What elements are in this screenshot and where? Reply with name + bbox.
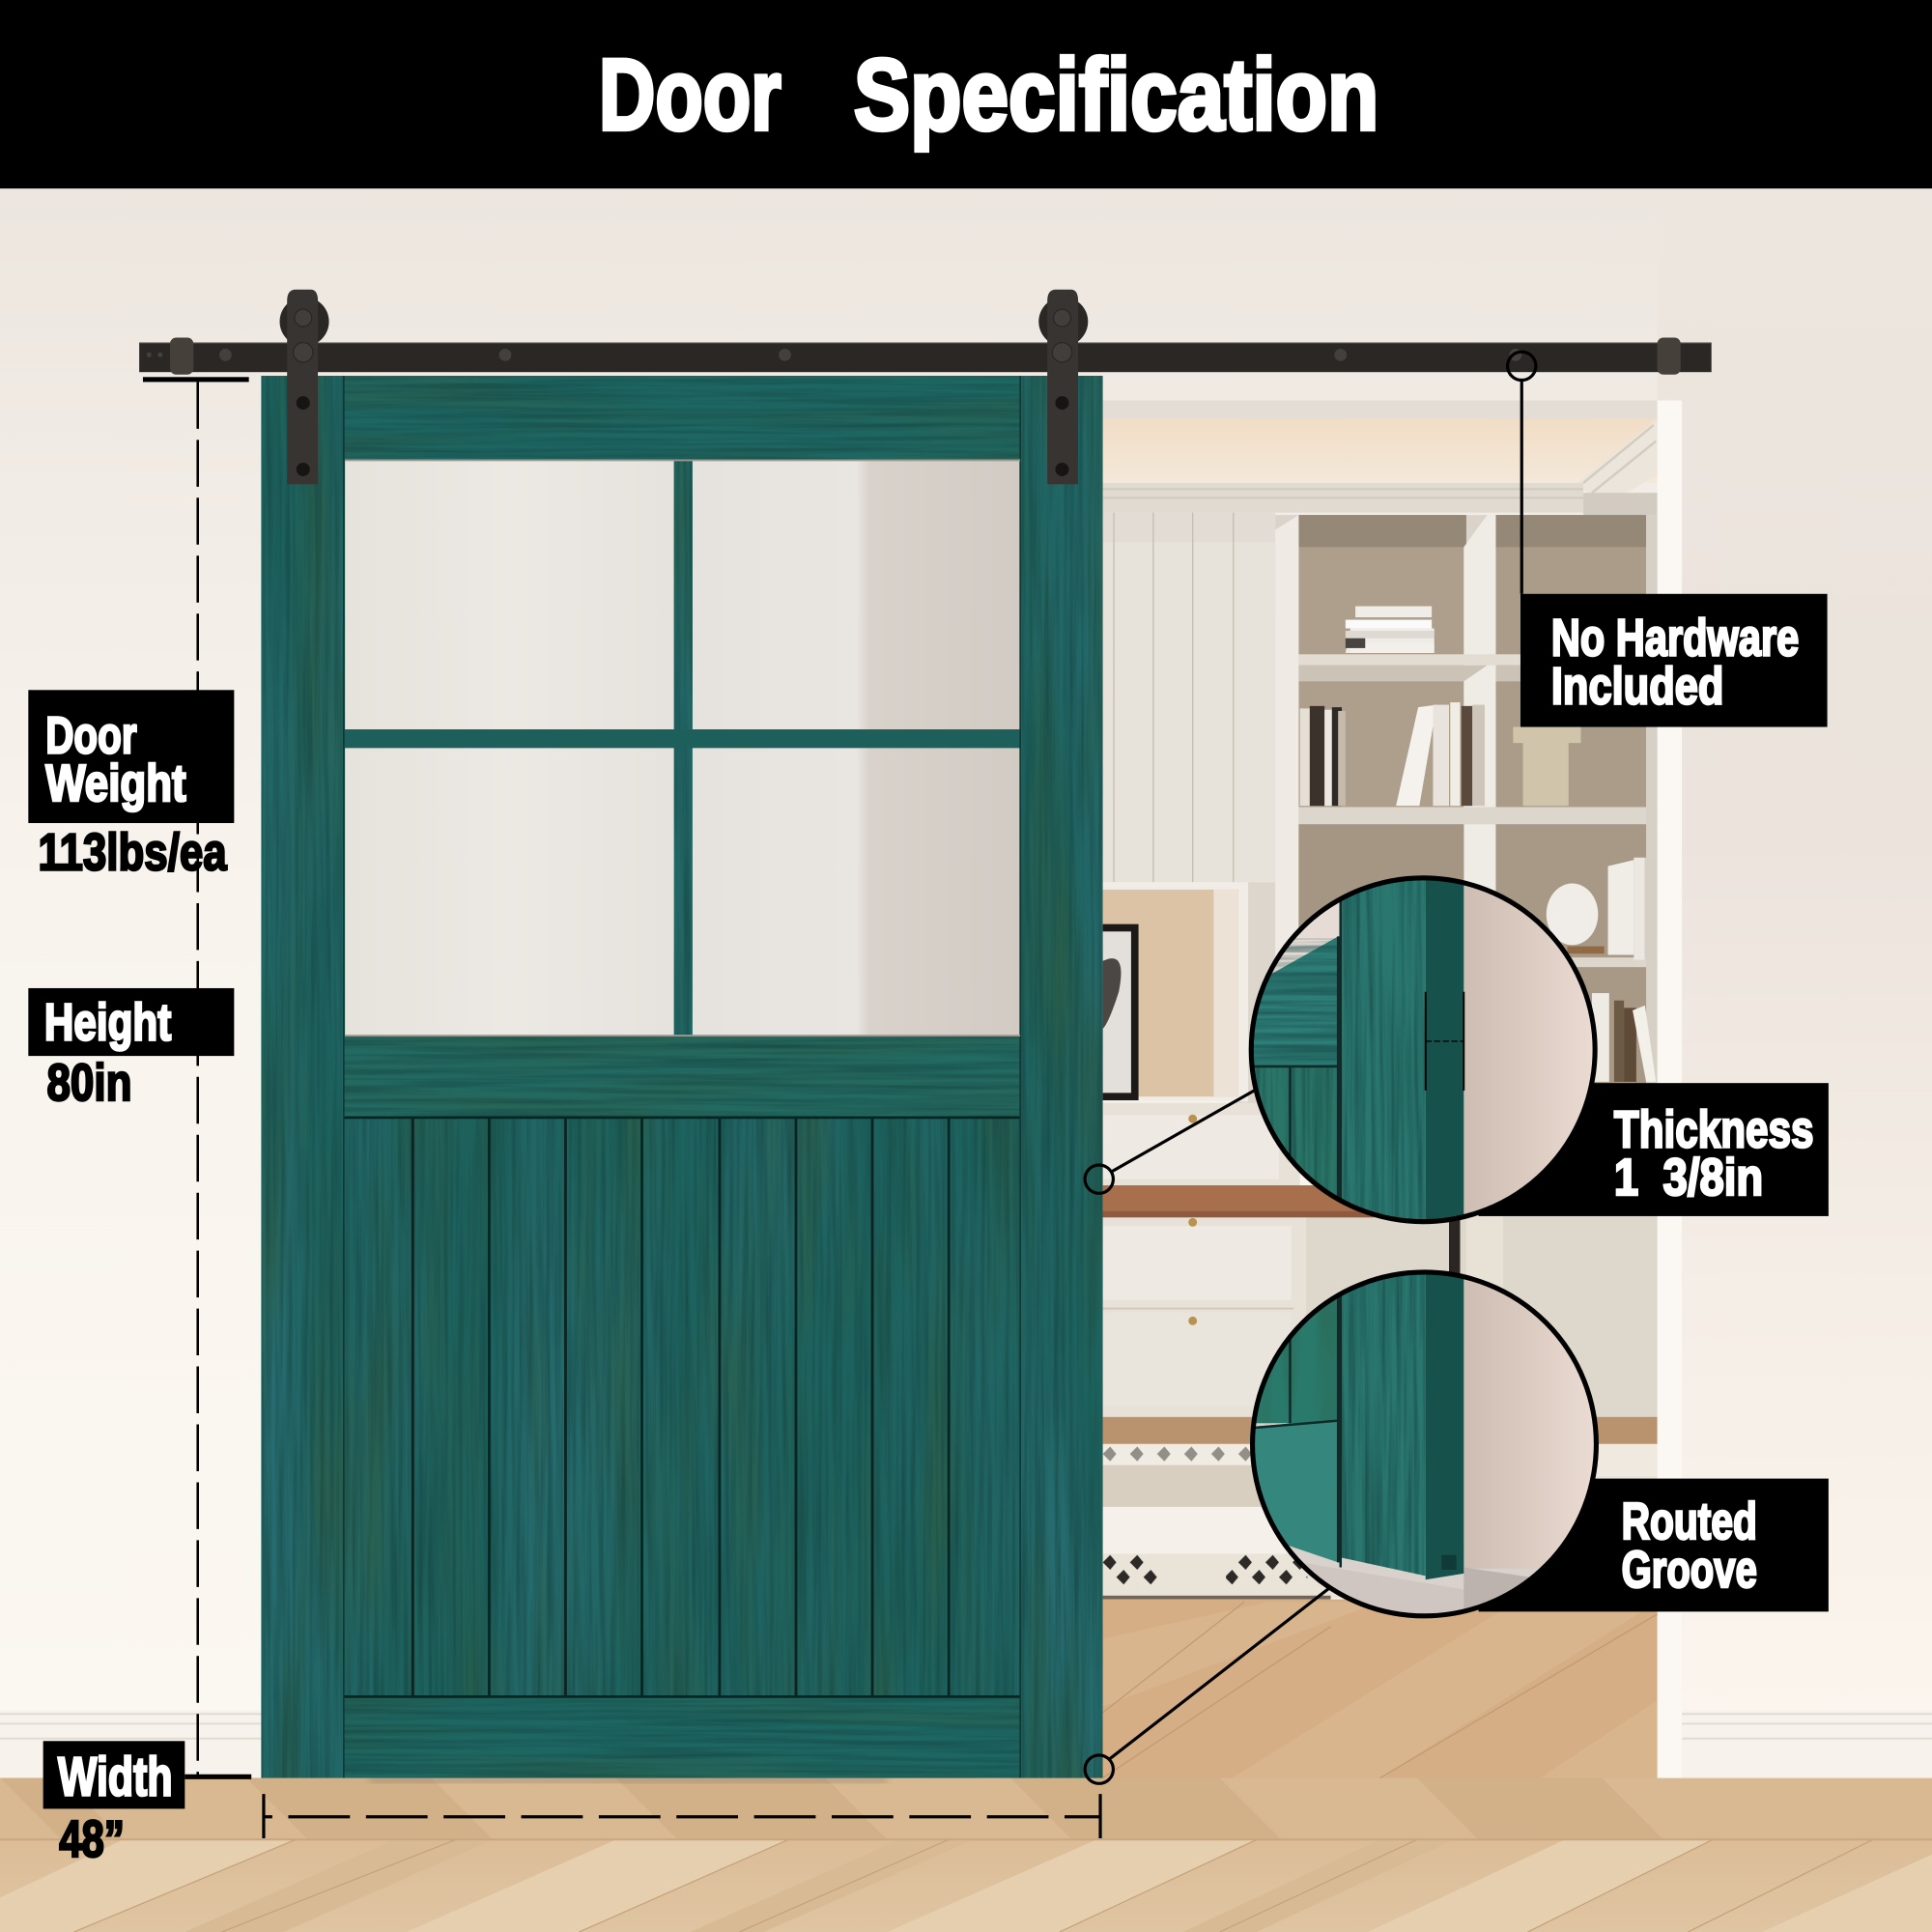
pointer: hardware — [1508, 352, 1536, 594]
title text: Door: Door — [599, 39, 781, 152]
rail stops — [170, 337, 193, 375]
right wall — [1658, 188, 1932, 1778]
rug and room floor — [1103, 1417, 1658, 1778]
width dimension line — [264, 1794, 1100, 1838]
vertical wood grain — [261, 376, 1103, 1778]
door weight value: 113lbs/ea — [39, 825, 228, 882]
callout: door weight — [28, 690, 234, 823]
callout: door weight: Door — [45, 707, 137, 764]
door base panel — [261, 376, 1103, 1778]
callout: height: Height — [44, 995, 171, 1052]
callout: height — [28, 988, 234, 1056]
door — [261, 376, 1103, 1783]
books row 1 — [1346, 607, 1435, 653]
callout: thickness — [1479, 1083, 1829, 1216]
rail bolts — [147, 349, 1521, 361]
barn door track rail — [139, 337, 1712, 375]
detail circle: thickness — [1251, 877, 1597, 1222]
baseboard left — [0, 1710, 261, 1778]
callout: no hardware included — [1520, 594, 1828, 727]
sculpture — [1513, 727, 1580, 806]
width value: 48” — [59, 1811, 125, 1868]
title text: Specification: Specification — [854, 39, 1378, 152]
floor — [0, 1778, 1932, 1932]
title bar — [0, 0, 1932, 188]
horizontal wood grain — [344, 376, 1020, 1778]
cabinet and desk — [1103, 1103, 1658, 1418]
callout: routed groove — [1479, 1479, 1829, 1611]
horizontal muntin — [344, 729, 1020, 748]
callout: thickness: 1 3/8in — [1614, 1150, 1763, 1207]
plank grooves and frame lines — [344, 376, 1020, 1778]
wainscot panels — [1103, 513, 1275, 1104]
callout: routed groove: Groove — [1622, 1542, 1757, 1599]
callout: no hardware included: No Hardware — [1551, 611, 1799, 668]
vase and books lower right — [1495, 824, 1656, 1106]
callout: thickness: Thickness — [1614, 1101, 1814, 1158]
height dimension line — [143, 377, 251, 1779]
callout: door weight: Weight — [45, 755, 186, 812]
glass panes — [345, 460, 1020, 1037]
callout: no hardware included: Included — [1551, 658, 1723, 715]
right hanger — [1038, 290, 1088, 484]
pointer: routed groove detail — [1085, 1587, 1331, 1783]
books row 2 — [1300, 702, 1485, 806]
height value: 80in — [46, 1055, 131, 1112]
callout: width: Width — [58, 1746, 173, 1806]
bookshelf — [1103, 515, 1658, 1778]
callout: routed groove: Routed — [1622, 1493, 1757, 1550]
left hanger — [280, 290, 329, 484]
detail circle: routed groove — [1251, 1272, 1598, 1618]
pointer: thickness detail — [1085, 1091, 1254, 1193]
picture frames — [1103, 882, 1248, 1101]
door shadow — [370, 1778, 887, 1783]
